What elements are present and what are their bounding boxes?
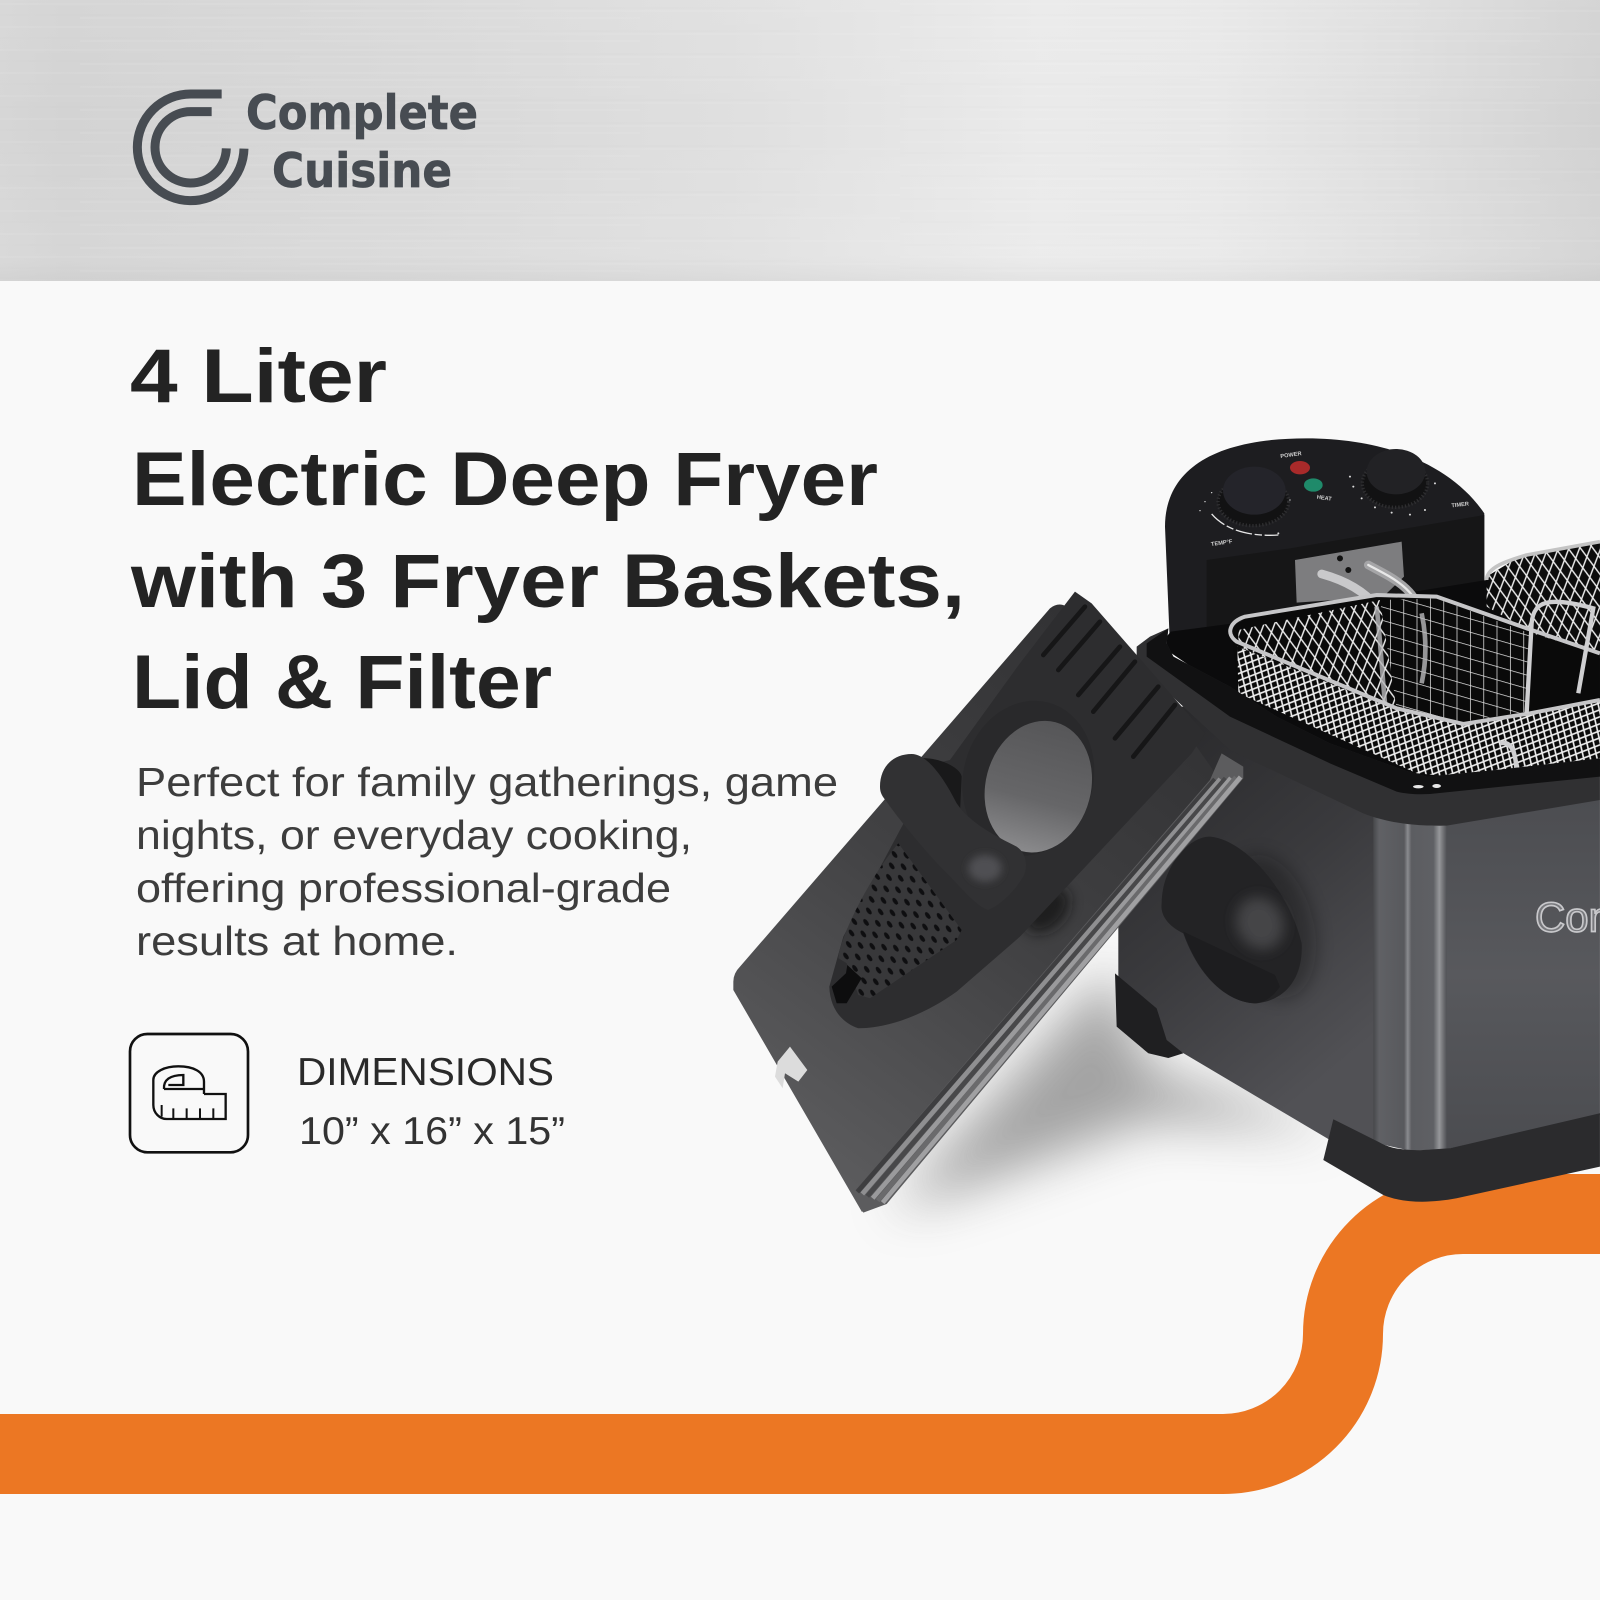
open lid <box>733 592 1243 1213</box>
description text: Perfect for family gatherings, game <box>136 759 838 805</box>
rear basket <box>1487 542 1600 660</box>
dimensions value: 10” x 16” x 15” <box>299 1110 565 1153</box>
power light <box>1290 461 1310 474</box>
fryer pot interior <box>1167 553 1600 783</box>
lid ribbed edge <box>852 753 1243 1213</box>
title: 4 Liter <box>130 334 387 419</box>
side mesh wall <box>1380 598 1530 722</box>
body left face <box>1118 707 1380 1140</box>
panel labels: HEAT <box>1316 495 1333 503</box>
fryer baskets <box>1230 542 1600 783</box>
heat light <box>1304 478 1323 492</box>
title: with 3 Fryer Baskets, <box>130 539 965 624</box>
panel labels <box>1211 451 1469 548</box>
description text <box>136 759 838 964</box>
front basket <box>1230 595 1600 783</box>
fryer rim <box>1137 628 1600 826</box>
heating element plate <box>1295 542 1404 603</box>
side handle <box>1161 837 1331 1009</box>
rear mesh wall <box>1238 600 1397 710</box>
logo wordmark <box>246 86 478 199</box>
panel labels: TEMP°F <box>1211 539 1233 548</box>
icon: measuring tape in rounded box <box>130 1034 248 1152</box>
panel labels: TIMER <box>1451 502 1469 509</box>
lid plate <box>733 605 1220 1212</box>
shadow under handle <box>1015 878 1078 942</box>
panel front face <box>1207 515 1484 633</box>
product photo: deep fryer with open lid <box>733 438 1600 1213</box>
lid handle <box>880 754 1026 910</box>
oil filter <box>832 843 962 1003</box>
front mesh wall <box>1237 647 1600 783</box>
timer dial <box>1362 449 1428 507</box>
floor shadow <box>890 970 1340 1210</box>
logo mark: concentric C rings <box>137 94 244 201</box>
dimensions label: DIMENSIONS <box>297 1051 554 1094</box>
temperature dial <box>1218 467 1289 526</box>
basket handle bracket <box>1500 602 1593 778</box>
title: Lid & Filter <box>132 640 552 725</box>
body corner highlight <box>1373 813 1447 1151</box>
dimensions block <box>130 1034 565 1153</box>
temperature scale arc <box>1212 514 1278 535</box>
description text: results at home. <box>136 918 458 964</box>
orange ribbon <box>0 1214 1600 1454</box>
scale ticks <box>1199 476 1436 534</box>
description text: offering professional-grade <box>136 865 671 911</box>
rear foot <box>1115 973 1183 1058</box>
logo: Complete Cuisine <box>137 86 478 201</box>
rim glossy lip <box>1147 628 1600 794</box>
title <box>130 334 965 725</box>
bottom trim <box>1323 1113 1600 1202</box>
control panel <box>1165 438 1484 647</box>
description text: nights, or everyday cooking, <box>136 812 692 858</box>
panel labels: POWER <box>1280 451 1302 460</box>
lid vent ribs <box>1043 607 1175 757</box>
brushed metal header band <box>0 0 1600 281</box>
raised handle base <box>829 592 1205 1028</box>
element tubes seen through mesh <box>1377 607 1425 703</box>
wire rim <box>1230 595 1600 724</box>
title: Electric Deep Fryer <box>132 437 878 522</box>
fryer body <box>1115 707 1600 1202</box>
body right face <box>1443 800 1600 1150</box>
lid notch <box>775 1047 807 1088</box>
sight window <box>945 686 1111 871</box>
heating element tubes <box>1322 565 1422 613</box>
heating element mounts <box>1337 555 1351 573</box>
logo wordmark: Complete <box>246 86 478 141</box>
logo wordmark: Cuisine <box>272 144 452 199</box>
